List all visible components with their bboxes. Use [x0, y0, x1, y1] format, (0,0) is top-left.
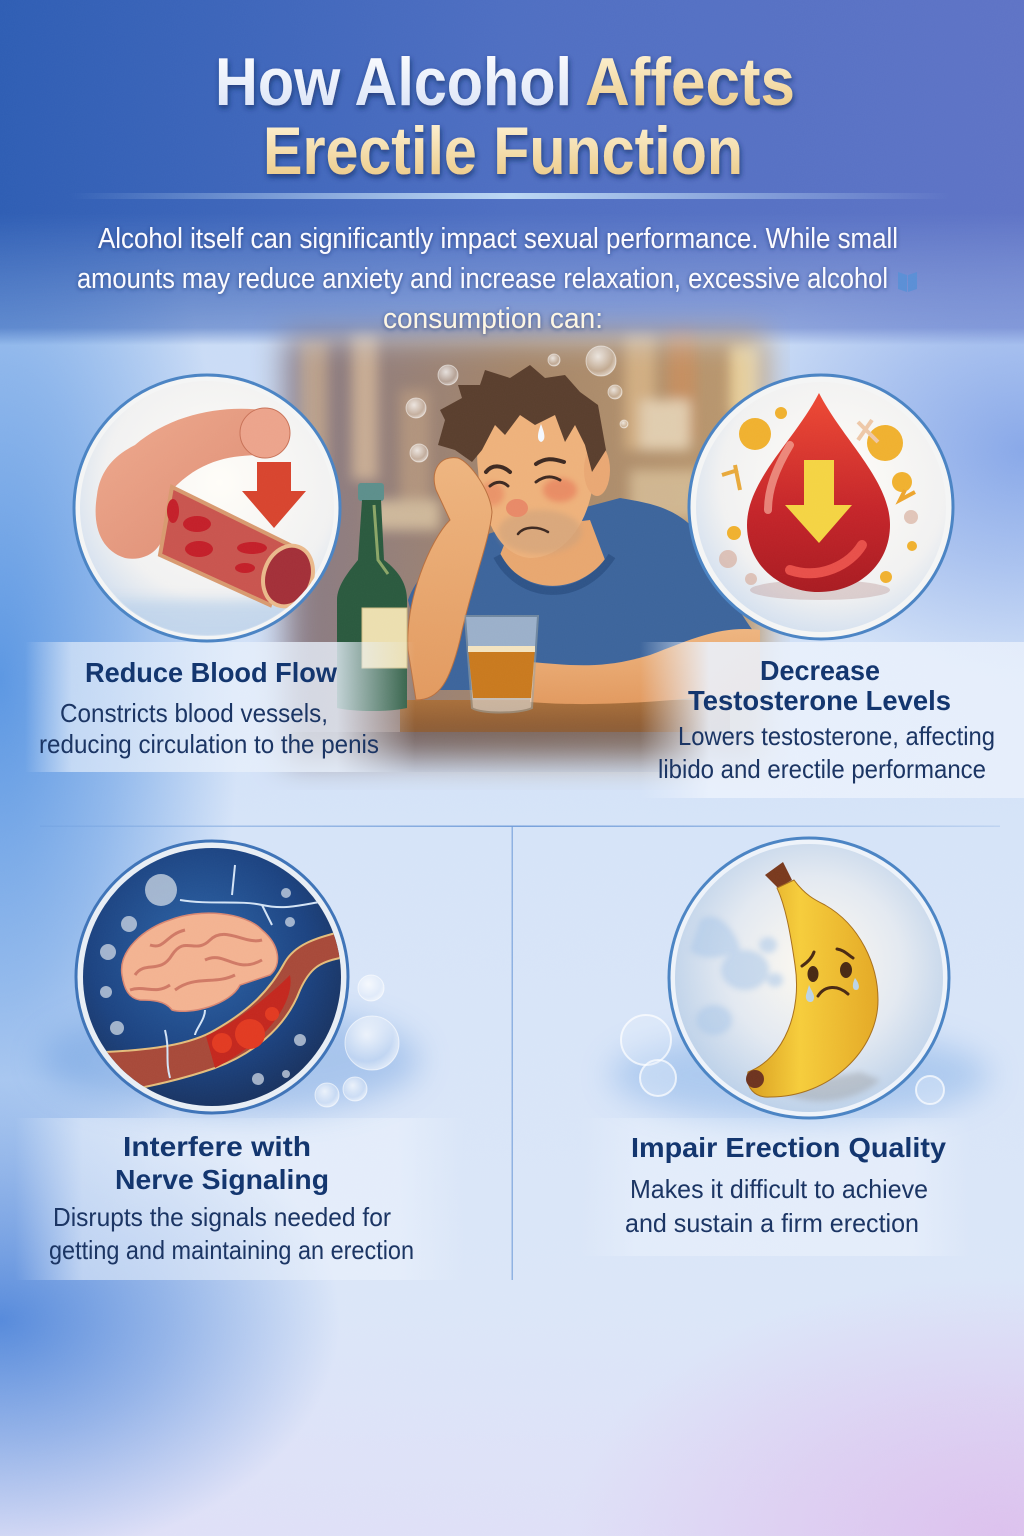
- caption band: [15, 1118, 465, 1280]
- heading: [688, 655, 951, 716]
- caption band: [25, 642, 415, 772]
- bottle: [337, 483, 407, 711]
- whisky glass: [465, 616, 538, 712]
- icon: brain and blood vessel: [76, 841, 348, 1113]
- shirt and torso: [408, 498, 760, 690]
- intro text: consumption can:: [383, 303, 603, 335]
- heading: Testosterone Levels: [688, 685, 951, 716]
- icon: sad banana: [669, 838, 949, 1118]
- title: Affects: [585, 44, 795, 120]
- decorative backdrop: [610, 1030, 990, 1120]
- panel: nerve signaling: [15, 841, 465, 1280]
- caption band: [580, 1118, 970, 1256]
- hair: [438, 365, 606, 472]
- bubbles: [315, 975, 399, 1107]
- description: and sustain a firm erection: [625, 1208, 919, 1238]
- bubbles: [621, 1015, 944, 1104]
- heading: Nerve Signaling: [115, 1164, 329, 1195]
- blurred bar background: [250, 300, 790, 790]
- description: [49, 1202, 414, 1265]
- title: Erectile Function: [263, 113, 743, 189]
- description: [625, 1174, 928, 1238]
- neck and head: [477, 392, 595, 558]
- icon: artery and arrow: [74, 375, 340, 641]
- decorative backdrop: [40, 1005, 420, 1115]
- description: Makes it difficult to achieve: [630, 1174, 928, 1204]
- icon: small book glyph: [898, 272, 917, 292]
- icon: blood drop with arrow: [689, 375, 953, 639]
- brain: [122, 913, 278, 1011]
- intro text: [77, 223, 898, 335]
- bubbles: [406, 346, 628, 462]
- caption band: [640, 642, 1024, 798]
- face features: [486, 459, 564, 534]
- panel: impair erection quality: [580, 838, 990, 1256]
- intro text: Alcohol itself can significantly impact sexual performance. While small: [98, 223, 898, 255]
- description: Constricts blood vessels,: [60, 698, 328, 728]
- description: Disrupts the signals needed for: [53, 1202, 391, 1232]
- panel: decrease testosterone: [640, 375, 1024, 798]
- description: [39, 698, 379, 759]
- left arm and hand on head: [408, 458, 492, 700]
- intro text: amounts may reduce anxiety and increase relaxation, excessive alcohol: [77, 263, 888, 295]
- description: reducing circulation to the penis: [39, 729, 379, 759]
- heading: [115, 1131, 329, 1195]
- title: [215, 44, 795, 189]
- panel: reduce blood flow: [25, 375, 415, 772]
- description: libido and erectile performance: [658, 754, 986, 784]
- heading: Interfere with: [123, 1131, 311, 1162]
- description: [658, 721, 995, 784]
- title: How Alcohol: [215, 44, 572, 120]
- heading: Reduce Blood Flow: [85, 657, 337, 688]
- description: getting and maintaining an erection: [49, 1235, 414, 1265]
- heading: Decrease: [760, 655, 880, 686]
- illustration: man drinking at a bar: [250, 300, 790, 790]
- description: Lowers testosterone, affecting: [678, 721, 995, 751]
- right forearm: [530, 629, 760, 704]
- heading: Impair Erection Quality: [631, 1132, 946, 1163]
